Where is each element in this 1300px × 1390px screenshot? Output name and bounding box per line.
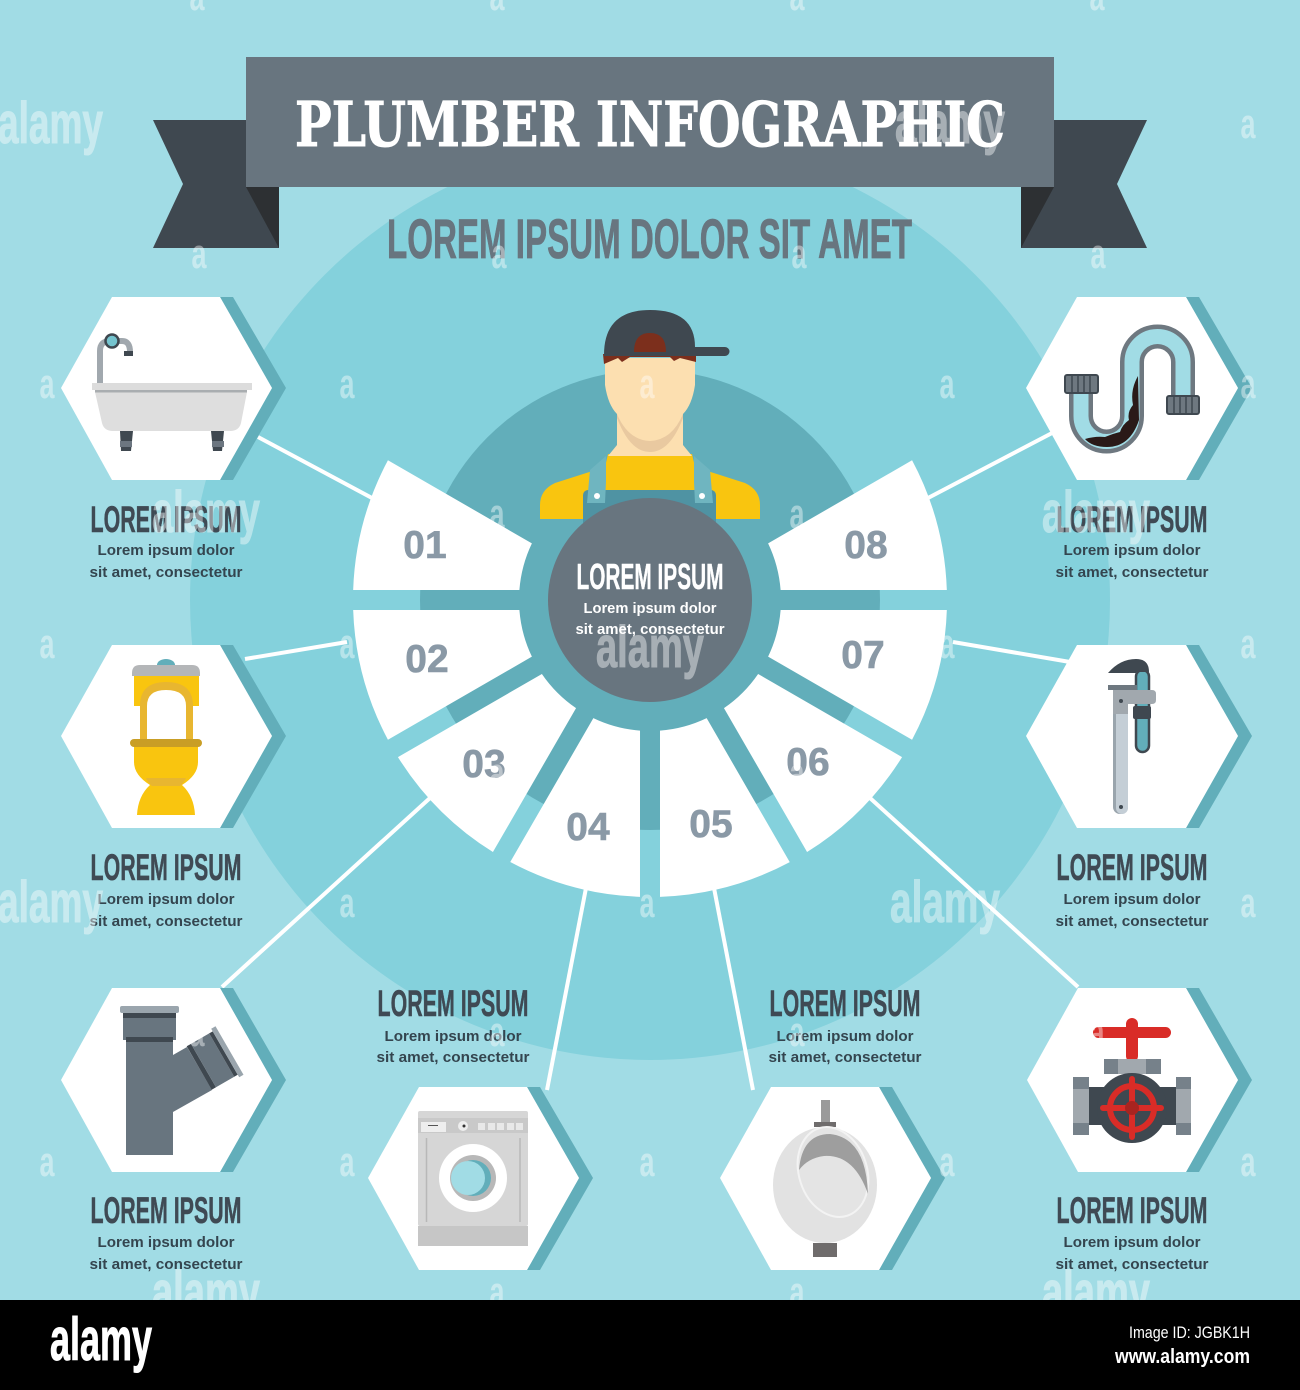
watermarks: alamy xyxy=(152,480,260,545)
watermarks: alamy xyxy=(0,870,103,935)
watermarks: a xyxy=(340,620,355,667)
wedge numbers: 01 xyxy=(403,524,447,567)
inner dark circle xyxy=(420,370,880,830)
text block: item 07 xyxy=(1056,847,1209,930)
watermarks: a xyxy=(492,230,507,277)
watermarks: a xyxy=(640,1138,655,1185)
text block: item 05: Lorem ipsum dolor xyxy=(776,1028,914,1045)
text block: item 04: sit amet, consectetur xyxy=(376,1049,530,1066)
watermarks: a xyxy=(940,360,955,407)
text block: item 01 xyxy=(90,499,243,581)
text block: item 01: LOREM IPSUM xyxy=(90,499,242,540)
watermarks: a xyxy=(40,1138,55,1185)
panel: valve hexagon xyxy=(1027,988,1252,1172)
text block: item 05: sit amet, consectetur xyxy=(768,1049,922,1066)
title ribbon xyxy=(153,57,1147,248)
wedge numbers: 02 xyxy=(405,638,449,681)
wedge numbers: 07 xyxy=(841,634,885,677)
radial wedges xyxy=(323,460,977,927)
watermarks: alamy xyxy=(1042,1260,1150,1325)
text block: item 05: LOREM IPSUM xyxy=(770,983,920,1024)
watermarks: a xyxy=(40,620,55,667)
text block: item 02 xyxy=(90,847,243,930)
watermarks: alamy xyxy=(596,615,704,680)
text block: item 06: sit amet, consectetur xyxy=(1056,1256,1209,1273)
center circle: LOREM IPSUM xyxy=(576,556,724,597)
watermarks: a xyxy=(340,360,355,407)
watermarks: a xyxy=(640,360,655,407)
wedge numbers: 08 xyxy=(844,524,888,567)
text block: item 04: Lorem ipsum dolor xyxy=(384,1028,522,1045)
footer bar: Image ID: JGBK1H xyxy=(1129,1323,1250,1342)
watermarks: alamy xyxy=(890,870,1000,935)
panel: washing machine hexagon xyxy=(368,1087,593,1270)
watermarks: a xyxy=(340,1138,355,1185)
text block: item 04: LOREM IPSUM xyxy=(378,983,528,1024)
panel: drain pipe hexagon xyxy=(61,988,286,1172)
text block: item 05 xyxy=(768,983,922,1066)
watermarks: alamy xyxy=(1042,480,1150,545)
watermarks: a xyxy=(1240,620,1256,667)
watermarks: a xyxy=(490,749,505,796)
watermarks: alamy xyxy=(0,91,103,156)
panel: bathtub hexagon xyxy=(61,297,286,480)
large background circle xyxy=(190,140,1110,1060)
text block: item 03 xyxy=(90,1190,243,1273)
watermarks: a xyxy=(192,230,207,277)
watermarks: a xyxy=(1240,360,1256,407)
watermarks: a xyxy=(940,1138,955,1185)
text block: item 01: Lorem ipsum dolor xyxy=(98,542,235,559)
watermarks: a xyxy=(790,1268,805,1315)
text block: item 08: Lorem ipsum dolor xyxy=(1064,542,1201,559)
subtitle: LOREM IPSUM DOLOR SIT AMET xyxy=(387,207,912,270)
center circle: sit amet, consectetur xyxy=(576,621,725,638)
footer bar: www.alamy.com xyxy=(1114,1346,1250,1368)
watermarks: a xyxy=(1240,1138,1256,1185)
panel: urinal hexagon xyxy=(720,1087,945,1270)
footer bar xyxy=(0,1300,1300,1390)
watermarks: a xyxy=(1240,879,1256,926)
watermarks: a xyxy=(1240,100,1256,147)
watermarks: a xyxy=(790,490,805,537)
watermarks: a xyxy=(490,490,505,537)
watermarks: a xyxy=(190,1008,205,1055)
text block: item 07: Lorem ipsum dolor xyxy=(1064,891,1201,908)
text block: item 08 xyxy=(1056,499,1209,581)
wedge numbers: 05 xyxy=(689,803,733,846)
watermarks: a xyxy=(1090,1008,1105,1055)
text block: item 01: sit amet, consectetur xyxy=(90,564,243,581)
center circle xyxy=(548,498,752,702)
text block: item 03: Lorem ipsum dolor xyxy=(98,1234,235,1251)
watermarks: a xyxy=(490,1268,505,1315)
wedge numbers: 06 xyxy=(786,741,830,784)
watermarks: a xyxy=(640,879,655,926)
icon: plumber figure xyxy=(540,310,760,530)
wedge numbers: 04 xyxy=(566,806,610,849)
watermarks: a xyxy=(40,360,55,407)
watermarks: a xyxy=(1090,230,1106,277)
watermarks: a xyxy=(790,749,805,796)
text block: item 04 xyxy=(376,983,530,1066)
watermarks: a xyxy=(792,230,807,277)
text block: item 08: sit amet, consectetur xyxy=(1056,564,1209,581)
watermarks: alamy xyxy=(895,91,1005,156)
panel: toilet hexagon xyxy=(61,645,286,828)
center circle: Lorem ipsum dolor xyxy=(584,600,717,617)
panel: wrench hexagon xyxy=(1026,645,1252,828)
panel: trap pipe hexagon xyxy=(1026,297,1252,480)
text block: item 02: Lorem ipsum dolor xyxy=(98,891,235,908)
text block: item 03: sit amet, consectetur xyxy=(90,1256,243,1273)
footer bar: alamy xyxy=(50,1306,152,1373)
wedge numbers xyxy=(403,524,888,849)
watermarks: a xyxy=(340,879,355,926)
title: PLUMBER INFOGRAPHIC xyxy=(295,88,1005,161)
wedge numbers: 03 xyxy=(462,743,506,786)
text block: item 07: sit amet, consectetur xyxy=(1056,913,1209,930)
text block: item 06 xyxy=(1056,1190,1209,1273)
text block: item 03: LOREM IPSUM xyxy=(90,1190,242,1231)
text block: item 06: Lorem ipsum dolor xyxy=(1064,1234,1201,1251)
text block: item 02: sit amet, consectetur xyxy=(90,913,243,930)
connector lines xyxy=(222,432,1078,1090)
watermarks: a xyxy=(790,1008,805,1055)
watermarks: a xyxy=(940,620,955,667)
text block: item 02: LOREM IPSUM xyxy=(90,847,242,888)
watermarks: a xyxy=(490,1008,505,1055)
watermarks: alamy xyxy=(152,1260,260,1325)
